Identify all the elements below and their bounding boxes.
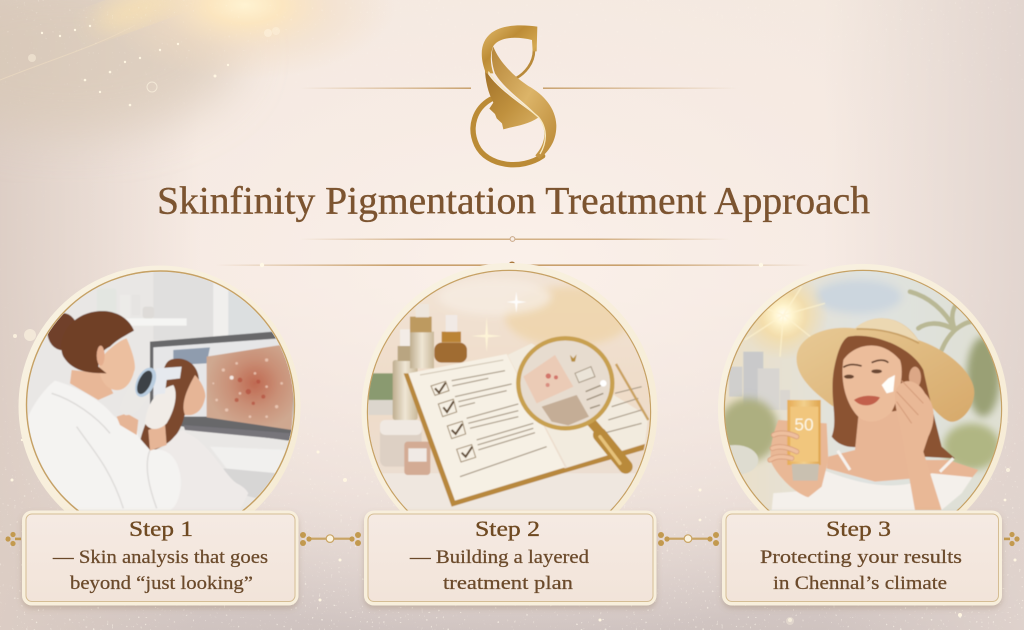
logo: thin upper curl — [516, 50, 534, 78]
card 3 line 2: in Chennal’s climate — [773, 574, 947, 594]
photo: treatment plan book — [368, 271, 650, 510]
photo: sunscreen in the sun: 50 — [794, 415, 814, 435]
card 3 line 1: Protecting your results — [760, 548, 962, 568]
header divider right — [543, 88, 738, 89]
photo: skin analysis scene — [28, 272, 294, 510]
circle frame 1 — [22, 270, 296, 544]
ornament divider lower — [215, 262, 810, 268]
header divider left — [300, 88, 471, 89]
logo: main ribbon band — [492, 47, 556, 159]
card 2 heading: Step 2 — [475, 516, 540, 541]
photo: sunscreen in the sun — [725, 271, 1001, 510]
panel: step 1 image — [18, 266, 300, 510]
connector: step 1 to step 2 — [300, 532, 361, 546]
panel: step 2 image — [362, 263, 658, 510]
logo: ribbon highlight — [488, 72, 545, 154]
connector: left end ornament — [5, 532, 21, 546]
circle frame 2 — [366, 267, 654, 555]
card 1 heading: Step 1 — [129, 516, 193, 541]
card: step 3 — [722, 510, 1002, 606]
ornament divider upper — [300, 237, 730, 241]
circle frame 3 — [722, 268, 1004, 550]
connector: step 2 to step 3 — [658, 532, 719, 546]
card 1 line 1: — Skin analysis that goes — [52, 548, 268, 568]
logo emblem — [473, 25, 556, 165]
card: step 2 — [364, 510, 656, 606]
logo: top band — [482, 25, 537, 73]
card 2 line 1: — Building a layered — [409, 548, 590, 568]
connector: right end ornament — [1004, 532, 1020, 546]
card 2 line 2: treatment plan — [443, 574, 573, 594]
card: step 1 — [22, 510, 298, 606]
card 3 heading: Step 3 — [826, 516, 891, 541]
title: Skinfinity Pigmentation Treatment Approach — [157, 178, 870, 222]
logo: lower loop — [473, 99, 543, 165]
panel: step 3 image — [718, 264, 1008, 510]
logo: face silhouette — [485, 68, 539, 129]
card 1 line 2: beyond “just looking” — [70, 574, 253, 594]
